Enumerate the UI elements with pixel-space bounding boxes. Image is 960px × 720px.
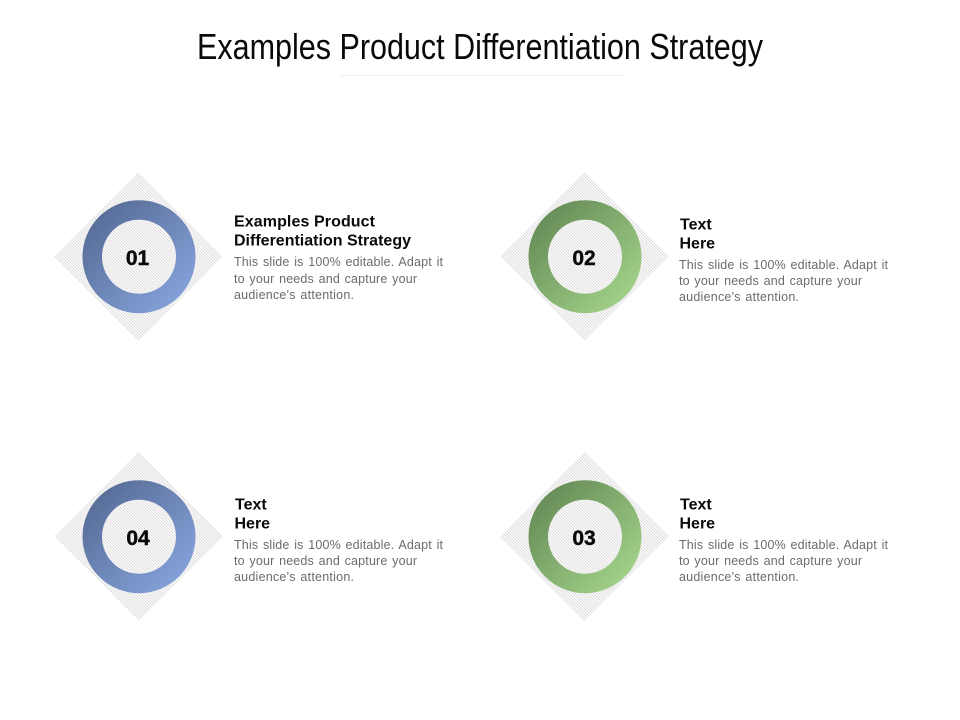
icon: hatched diamond 04 xyxy=(54,452,223,621)
heading 03: Text xyxy=(680,496,712,514)
heading 01: Differentiation Strategy xyxy=(234,232,411,250)
text block 04: This slide is 100% editable. Adapt it xyxy=(234,538,444,552)
panel: item 01 xyxy=(54,172,444,341)
title: Examples Product Differentiation Strategy xyxy=(197,26,763,67)
icon: blue ring 01 xyxy=(82,200,196,313)
text block 03: This slide is 100% editable. Adapt it xyxy=(679,538,889,552)
panel: item 02 xyxy=(500,172,889,341)
number 02: 02 xyxy=(572,247,596,270)
icon: green ring 02 xyxy=(528,200,642,313)
icon: hatched diamond 02 xyxy=(500,172,669,341)
text block 01: to your needs and capture your xyxy=(234,272,417,286)
icon: hatched diamond 01 xyxy=(54,172,223,341)
panel: item 04 xyxy=(54,452,444,621)
panel: item 03 xyxy=(500,452,889,621)
number 01: 01 xyxy=(126,247,149,270)
text block 04: to your needs and capture your xyxy=(234,554,417,568)
heading 04: Text xyxy=(235,496,267,514)
title underline xyxy=(340,75,622,76)
text block 04: audience's attention. xyxy=(234,570,354,584)
number 03: 03 xyxy=(572,527,596,550)
icon: blue ring 04 xyxy=(82,480,196,593)
number 04: 04 xyxy=(126,527,150,550)
text block 01: This slide is 100% editable. Adapt it xyxy=(234,255,444,269)
icon: green ring 03 xyxy=(528,480,642,593)
icon: hatched diamond 03 xyxy=(500,452,669,621)
heading 02: Here xyxy=(680,236,715,252)
text block 01: audience's attention. xyxy=(234,288,354,302)
text block 02: audience's attention. xyxy=(679,290,799,304)
text block 03: to your needs and capture your xyxy=(679,554,862,568)
heading 02: Text xyxy=(680,216,712,234)
text block 02: This slide is 100% editable. Adapt it xyxy=(679,258,889,272)
heading 04: Here xyxy=(234,516,270,532)
heading 01: Examples Product xyxy=(234,214,376,230)
heading 03: Here xyxy=(680,516,715,532)
text block 02: to your needs and capture your xyxy=(679,274,862,288)
text block 03: audience's attention. xyxy=(679,570,799,584)
